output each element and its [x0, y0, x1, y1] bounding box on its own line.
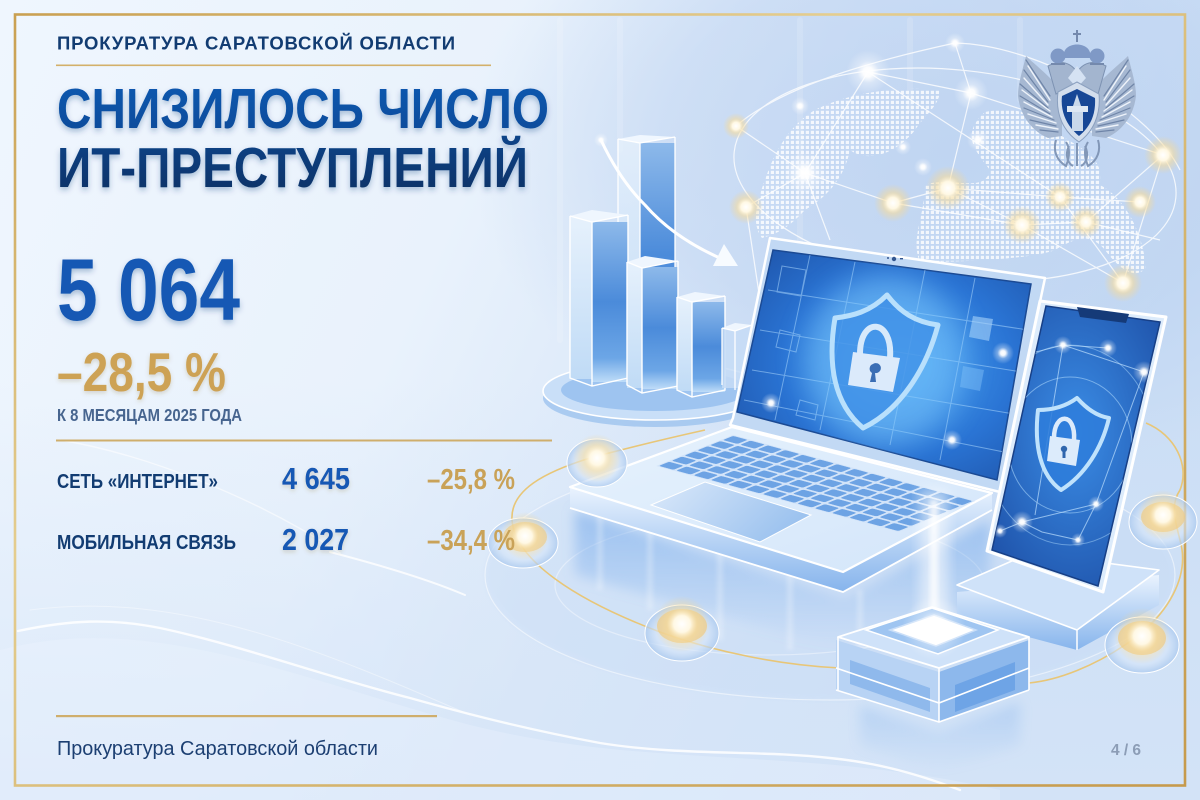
page number: 4 / 6: [1111, 742, 1141, 759]
node: [1105, 608, 1179, 673]
node: [488, 512, 558, 568]
shield with padlock: [832, 295, 938, 428]
row: mobile: –34,4 %: [427, 525, 515, 557]
footer: Прокуратура Саратовской области: [57, 737, 378, 760]
phone shield: [1037, 398, 1109, 490]
bar second: [570, 210, 628, 386]
padlock: [848, 327, 900, 392]
glowing node pods: [488, 434, 1197, 673]
network lines: [723, 43, 1187, 303]
period caption: К 8 МЕСЯЦАМ 2025 ГОДА: [57, 405, 242, 425]
bar fifth: [722, 323, 752, 390]
trackpad: [651, 482, 811, 542]
row: mobile: МОБИЛЬНАЯ СВЯЗЬ: [57, 532, 236, 554]
row: internet: [57, 461, 515, 496]
row: internet: 4 645: [282, 461, 350, 496]
row: mobile: [57, 522, 515, 557]
bar third: [627, 256, 678, 393]
phone screen: [992, 306, 1160, 586]
glass bar chart with platform: [543, 133, 767, 427]
row: mobile: 2 027: [282, 522, 349, 557]
laptop base: [570, 427, 992, 592]
title: ИТ-ПРЕСТУПЛЕНИЙ: [57, 135, 528, 200]
main figure: 5 064: [57, 240, 240, 339]
node: [1129, 490, 1197, 549]
screen bezel: [730, 238, 1045, 492]
emblem: prosecutor's office eagle: [1018, 30, 1136, 166]
platform: [543, 362, 767, 427]
bar fourth: [677, 292, 725, 397]
network stars: [723, 33, 1182, 302]
main change: –28,5 %: [57, 341, 226, 403]
dotted continents: [756, 89, 1146, 273]
divider: [56, 440, 552, 442]
title: [57, 77, 549, 200]
row: internet: –25,8 %: [427, 464, 515, 496]
laptop: [570, 238, 1045, 592]
main figure: [57, 240, 240, 403]
screen: [737, 250, 1031, 480]
downward trend arrow: [594, 133, 738, 266]
phone stand: [957, 553, 1159, 650]
header label: ПРОКУРАТУРА САРАТОВСКОЙ ОБЛАСТИ: [57, 32, 455, 54]
bar tall: [618, 135, 675, 370]
keyboard: [656, 435, 975, 532]
floor disc with reflections: [485, 450, 1175, 700]
central glass chip block: [836, 490, 1029, 772]
smartphone: [985, 301, 1166, 592]
node: [567, 434, 627, 487]
world globe with network: [723, 33, 1187, 303]
phone padlock: [1047, 419, 1080, 466]
row: internet: СЕТЬ «ИНТЕРНЕТ»: [57, 471, 218, 493]
gold connecting ring: [512, 423, 1183, 683]
title: СНИЗИЛОСЬ ЧИСЛО: [57, 77, 549, 141]
camera: [887, 257, 903, 261]
node: [645, 596, 719, 661]
